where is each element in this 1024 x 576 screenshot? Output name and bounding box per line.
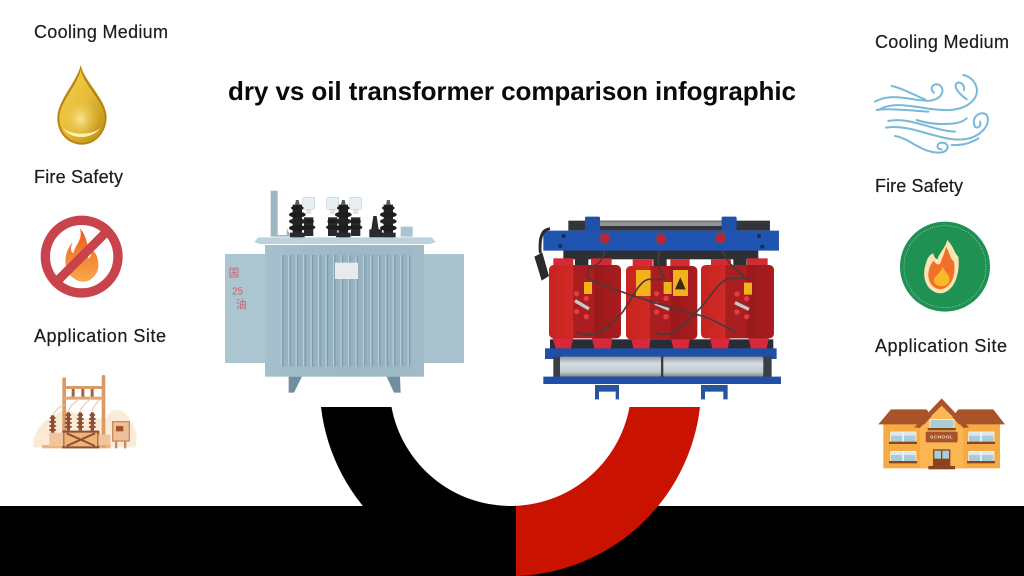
oil transformer: left panel with text: 25 <box>232 287 244 298</box>
title: dry vs oil transformer comparison infographic <box>228 76 796 106</box>
oil transformer <box>225 191 464 393</box>
dry transformer: blue beam <box>543 231 779 251</box>
background band <box>0 506 1024 576</box>
oil transformer: right panel <box>424 254 464 363</box>
left heading: fire safety: Fire Safety <box>34 167 123 187</box>
oil transformer: feet <box>289 377 401 393</box>
oil transformer: lid <box>254 237 436 244</box>
oil transformer: bushings <box>289 197 413 237</box>
icon: substation <box>33 375 137 448</box>
dry transformer: bottom rail <box>543 377 781 384</box>
arc: black half <box>321 407 516 576</box>
arc: red half <box>510 407 700 576</box>
oil transformer: conservator pipe <box>271 191 292 237</box>
oil transformer: nameplate <box>335 263 358 279</box>
icon: flame on green badge <box>900 222 990 312</box>
oil transformer: left panel with text: 国 <box>229 268 239 280</box>
oil transformer: left panel with text: 油 <box>236 298 247 311</box>
dry transformer: fan rollers <box>553 357 772 377</box>
icon: oil drop <box>57 65 107 145</box>
dry transformer: coil 2 <box>626 266 697 339</box>
dry transformer: central posts <box>563 250 758 267</box>
right heading: cooling medium: Cooling Medium <box>875 32 1009 52</box>
dry transformer: lower dark band <box>550 339 773 349</box>
icon: school <box>878 398 1005 469</box>
left heading: application site: Application Site <box>34 326 166 346</box>
dry transformer: silver links <box>575 301 749 309</box>
right heading: application site: Application Site <box>875 336 1007 356</box>
icon: prohibited fire <box>45 220 118 293</box>
oil transformer: tank body <box>265 245 424 377</box>
icon: wind <box>875 75 988 153</box>
left heading: cooling medium: Cooling Medium <box>34 22 168 42</box>
dry transformer: cables <box>577 243 747 335</box>
dry transformer: terminals <box>574 291 749 319</box>
dry transformer: warning labels <box>584 270 752 296</box>
dry transformer: top bar <box>568 217 770 232</box>
dry transformer: coil caps <box>553 258 768 269</box>
right heading: fire safety: Fire Safety <box>875 176 963 196</box>
icon: school: SCHOOL <box>930 435 953 441</box>
dry transformer: coil 3 <box>701 265 774 338</box>
dry transformer: coil feet <box>552 337 769 348</box>
dry transformer: lower rail <box>545 348 777 359</box>
dry transformer <box>534 217 781 399</box>
oil transformer: left panel with text <box>225 254 265 363</box>
oil transformer: radiator fins <box>281 255 411 367</box>
dry transformer: control cable <box>534 227 550 281</box>
dry transformer: coil 1 <box>549 265 621 338</box>
dry transformer: beam bolts <box>558 232 764 249</box>
dry transformer: base feet <box>595 385 728 399</box>
